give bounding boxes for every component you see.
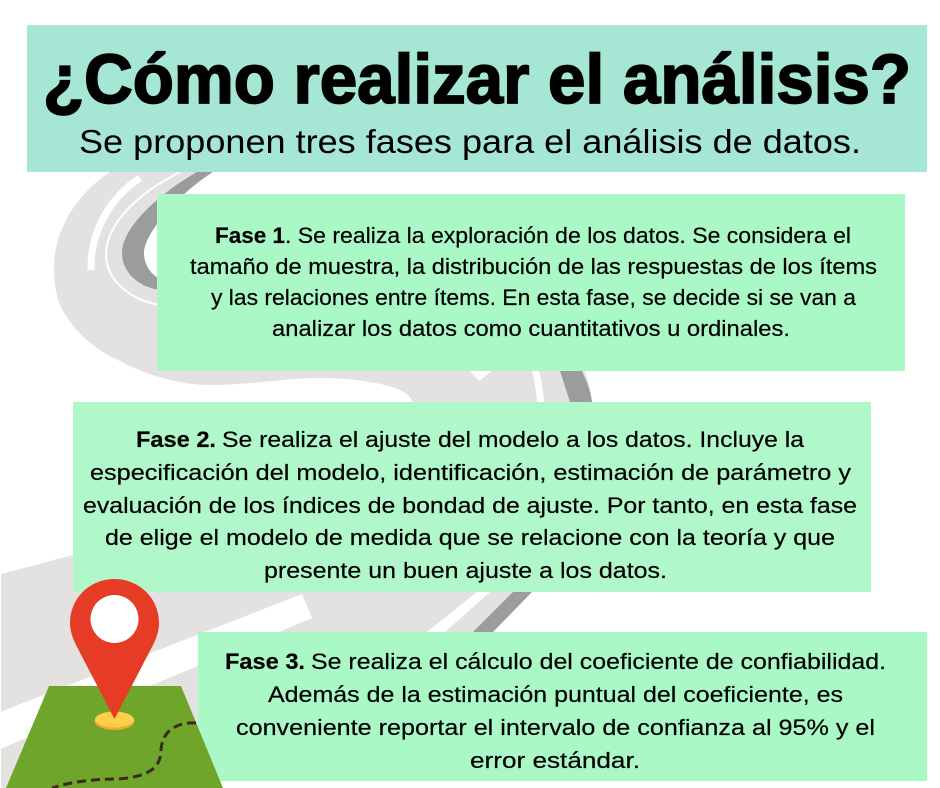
fase 1 text <box>190 223 877 341</box>
fase 2 text: Fase 2. <box>136 427 216 452</box>
title: ¿Cómo realizar el análisis? <box>43 40 911 118</box>
green ground <box>6 686 223 788</box>
title banner <box>27 25 927 172</box>
panel: fase 1 <box>157 194 905 371</box>
fase 1 text: tamaño de muestra, la distribución de las respuestas de los ítems <box>190 254 877 279</box>
fase 2 text <box>83 427 857 583</box>
fase 3 text: Además de la estimación puntual del coeficiente, es <box>268 682 843 707</box>
fase 1 text: y las relaciones entre ítems. En esta fase, se decide si se van a <box>211 285 856 310</box>
fase 2 text: especificación del modelo, identificación, estimación de parámetro y <box>90 460 852 485</box>
panel: fase 3 <box>198 632 927 781</box>
winding road background <box>0 172 592 788</box>
fase 2 text: de elige el modelo de medida que se relacione con la teoría y que <box>105 525 835 550</box>
fase 3 text: Fase 3. <box>225 649 305 674</box>
fase 1 text: . Se realiza la exploración de los datos. Se considera el <box>285 223 851 248</box>
red pin <box>70 579 159 719</box>
subtitle: Se proponen tres fases para el análisis de datos. <box>79 123 861 160</box>
fase 2 text: evaluación de los índices de bondad de ajuste. Por tanto, en esta fase <box>83 493 857 518</box>
fase 1 text: analizar los datos como cuantitativos u ordinales. <box>272 316 790 341</box>
fase 3 text: conveniente reportar el intervalo de confianza al 95% y el <box>236 715 875 740</box>
dashed route <box>52 723 196 788</box>
fase 1 text: Fase 1 <box>215 223 285 248</box>
gold base <box>94 712 134 730</box>
fase 2 text: Se realiza el ajuste del modelo a los datos. Incluye la <box>222 427 805 452</box>
fase 3 text: Se realiza el cálculo del coeficiente de confiabilidad. <box>311 649 886 674</box>
panel: fase 2 <box>73 402 871 592</box>
fase 2 text: presente un buen ajuste a los datos. <box>264 558 667 583</box>
fase 3 text: error estándar. <box>470 748 640 773</box>
icon: map location pin on green ground <box>6 579 223 788</box>
fase 3 text <box>225 649 886 773</box>
